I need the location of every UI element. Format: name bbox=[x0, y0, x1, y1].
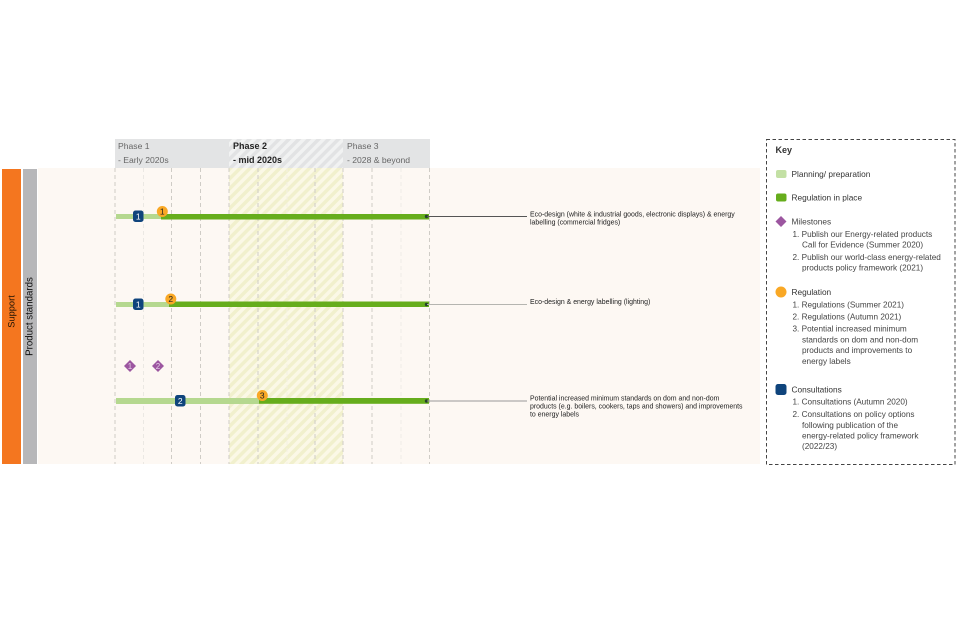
row 1 description: Eco-design (white & industrial goods, electronic displays) & energy bbox=[530, 212, 735, 218]
planning bar bbox=[116, 302, 170, 307]
phase 2 label: - mid 2020s bbox=[233, 155, 282, 165]
panel: timeline background bbox=[38, 168, 760, 464]
planning bar bbox=[116, 398, 259, 404]
row 3 description: Potential increased minimum standards on dom and non-dom bbox=[530, 396, 719, 402]
key: consultations: energy-related policy framework bbox=[802, 432, 919, 440]
key: consultations: following publication of the bbox=[802, 421, 898, 430]
key panel bbox=[766, 140, 955, 464]
consultation marker 2 bbox=[175, 395, 186, 406]
key: milestones: products policy framework (2021) bbox=[802, 264, 923, 272]
milestone marker 1: 1 bbox=[128, 362, 133, 371]
key: regulation: energy labels bbox=[802, 357, 851, 366]
regulation bar bbox=[161, 214, 429, 220]
phase header bbox=[115, 139, 430, 168]
key: planning: Planning/ preparation bbox=[792, 169, 871, 179]
key: consultations: Consultations bbox=[792, 384, 842, 394]
phase 1 label: Phase 1 bbox=[118, 141, 150, 151]
key: regulation: 1. Regulations (Summer 2021) bbox=[792, 300, 904, 310]
phase 2 hatched band bbox=[229, 168, 343, 464]
milestone marker 2 bbox=[152, 360, 164, 372]
side band: Support: Support bbox=[6, 295, 16, 328]
regulation marker 3: 3 bbox=[260, 390, 265, 400]
row 1: eco-design white goods bbox=[116, 206, 735, 226]
regulation marker 1 bbox=[157, 206, 168, 217]
consultation marker 1: 1 bbox=[136, 212, 141, 222]
consultation marker 1 bbox=[133, 210, 144, 222]
regulation marker 1: 1 bbox=[160, 206, 165, 216]
side band: Product standards: Product standards bbox=[24, 277, 36, 356]
side band: Support bbox=[2, 169, 21, 464]
row 1 description: labelling (commercial fridges) bbox=[530, 220, 620, 226]
key: consultations: 2. Consultations on policy options bbox=[792, 410, 914, 419]
key: regulation: 3. Potential increased minimum bbox=[792, 324, 907, 334]
regulation marker 3 bbox=[257, 390, 268, 401]
row 2 description: Eco-design & energy labelling (lighting) bbox=[530, 299, 650, 306]
key: milestones: Milestones bbox=[792, 216, 831, 226]
leader line bbox=[427, 400, 527, 402]
phase 1 label: - Early 2020s bbox=[118, 155, 169, 165]
leader line bbox=[427, 216, 527, 218]
consultation marker 2: 2 bbox=[178, 396, 183, 406]
key: regulation bbox=[776, 286, 918, 366]
phase 3 label: Phase 3 bbox=[347, 141, 379, 151]
key title: Key bbox=[776, 145, 792, 155]
row 3 description: to energy labels bbox=[530, 412, 580, 418]
phase 3 label: - 2028 & beyond bbox=[347, 155, 410, 165]
key: consultations bbox=[776, 384, 919, 451]
row 3 description: products (e.g. boilers, cookers, taps and showers) and improvements bbox=[530, 404, 743, 410]
key: milestones: 2. Publish our world-class energy-related bbox=[792, 253, 941, 262]
planning bar bbox=[116, 214, 162, 219]
regulation marker 2: 2 bbox=[168, 294, 173, 304]
row 3: potential increased standards bbox=[116, 390, 743, 418]
regulation bar bbox=[169, 302, 429, 307]
regulation bar bbox=[259, 398, 429, 404]
key: consultations: (2022/23) bbox=[802, 442, 837, 451]
consultation marker 1: 1 bbox=[136, 300, 141, 310]
phase 2 label: Phase 2 bbox=[233, 141, 267, 151]
key: regulation: standards on dom and non-dom bbox=[802, 336, 918, 344]
key: milestones bbox=[776, 216, 941, 272]
key: milestones: Call for Evidence (Summer 2020) bbox=[802, 240, 923, 250]
regulation marker 2 bbox=[165, 294, 176, 304]
key: milestones: 1. Publish our Energy-related products bbox=[792, 230, 932, 239]
side band: Product standards bbox=[23, 169, 37, 464]
key: regulation: products and improvements to bbox=[802, 346, 913, 355]
key: consultations: 1. Consultations (Autumn 2020) bbox=[792, 398, 908, 406]
consultation marker 1 bbox=[133, 298, 144, 310]
key: regulation: 2. Regulations (Autumn 2021) bbox=[792, 312, 902, 322]
row 2: eco-design lighting bbox=[116, 294, 650, 310]
key: regulation: Regulation bbox=[792, 287, 832, 297]
milestone marker 2: 2 bbox=[156, 362, 161, 371]
milestone marker 1 bbox=[124, 360, 136, 372]
key: regulation in place: Regulation in place bbox=[792, 192, 862, 202]
leader line bbox=[427, 304, 527, 306]
